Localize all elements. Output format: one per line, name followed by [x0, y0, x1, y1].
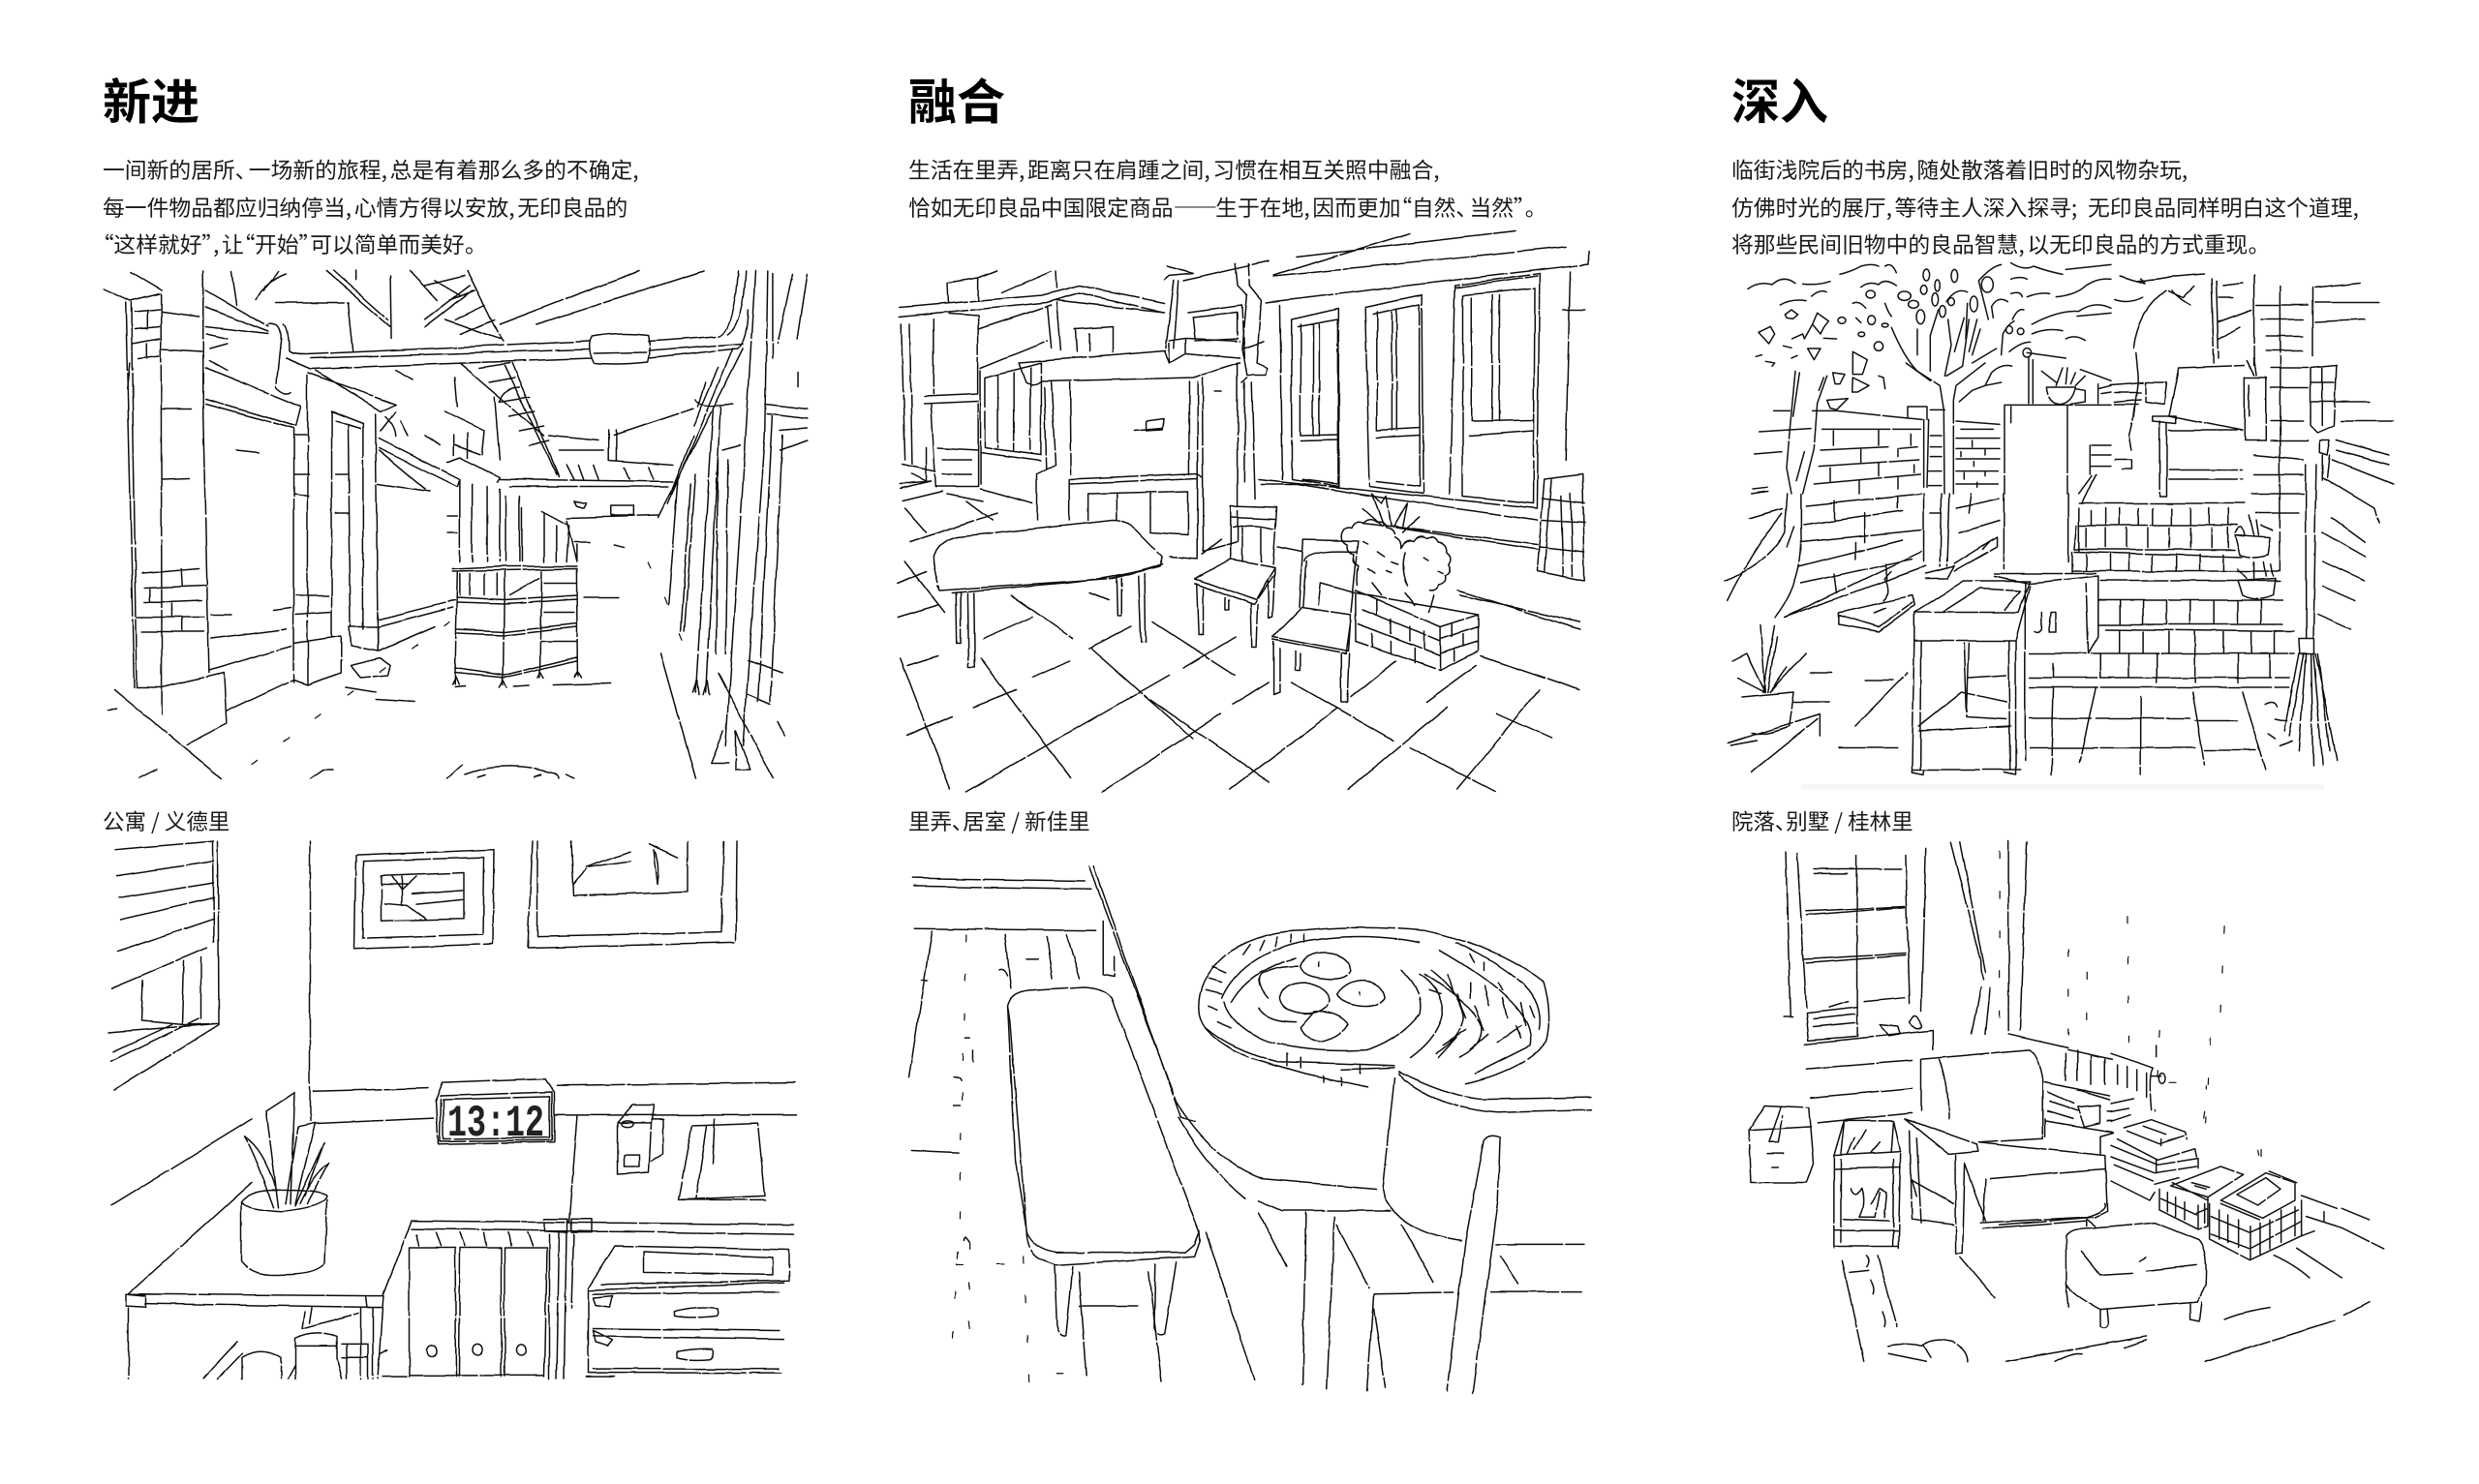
- potted plant: [241, 1093, 329, 1275]
- illustration: bench and basket at Xinjiali: [909, 866, 1592, 1393]
- woven tray: [1199, 927, 1549, 1087]
- brick planter with plant: [1318, 494, 1479, 670]
- wire basket left: [2159, 1166, 2244, 1229]
- wall, eaves and doors: [205, 290, 519, 712]
- paving tiles: [898, 482, 1579, 792]
- rug and slippers: [1842, 1256, 2370, 1361]
- caption: 公寓 / 义德里: 公寓 / 义德里: [103, 805, 230, 836]
- digital clock case: [436, 1078, 554, 1144]
- small cart with plants: [1834, 1121, 1901, 1248]
- right brick walls: [2212, 276, 2393, 629]
- chair one: [1195, 505, 1277, 648]
- building roofline and left facade: [900, 271, 1165, 542]
- title: 深入: 深入: [1731, 64, 1828, 134]
- text block: 新进 description: 一间新的居所、一场新的旅程,总是有着那么多的不确定,: [103, 153, 641, 185]
- cabinet top with potted plant: [2005, 348, 2111, 494]
- caption: 院落、别墅 / 桂林里: 院落、别墅 / 桂林里: [1731, 805, 1913, 836]
- text block: 深入 description: [1731, 153, 2361, 259]
- tree trunks and branches: [1787, 303, 2012, 494]
- drawers and papers: [586, 1246, 789, 1377]
- right facade and windows: [1259, 231, 1589, 552]
- text block: 深入 description: 临街浅院后的书房,随处散落着旧时的风物杂玩,: [1731, 153, 2190, 185]
- caption: 里弄、居室 / 新佳里: 里弄、居室 / 新佳里: [908, 805, 1090, 836]
- book stack: [2111, 1099, 2198, 1200]
- illustration detail: radiator end, book stack and wire baskets: [2111, 1045, 2384, 1278]
- radiator end and valve: [2111, 1045, 2259, 1155]
- cardboard box: [1749, 1105, 1814, 1182]
- illustration: courtyard steps at Guilinli: [1726, 273, 2393, 774]
- left brick walls, lower: [1749, 492, 1999, 618]
- clock digits: 13:12: [447, 1099, 544, 1149]
- ground marks and manhole: [139, 561, 785, 778]
- potted plants on steps: [2235, 515, 2276, 599]
- right posts and door frames: [658, 271, 808, 770]
- overhead pipes: [231, 271, 748, 394]
- roof and far buildings: [325, 271, 673, 561]
- footstool: [2066, 1223, 2207, 1328]
- wire basket right: [2210, 1171, 2302, 1260]
- title: 新进: 新进: [103, 64, 199, 134]
- band: faint image edge under courtyard sketch: [1801, 784, 2324, 790]
- text block: 融合 description: 生活在里弄,距离只在肩踵之间,习惯在相互关照中融合,: [908, 153, 1442, 185]
- broom: [2284, 465, 2337, 765]
- wall and picture frames: [310, 841, 737, 1121]
- text block: 深入 description: 将那些民间旧物中的良品智慧,以无印良品的方式重现。: [1731, 227, 2259, 259]
- floor boards: [909, 878, 1161, 1383]
- chair two: [1273, 540, 1358, 703]
- illustration: apartment desk at Yideli: [108, 841, 799, 1378]
- text block: 新进 description: 每一件物品都应归纳停当,心情方得以安放,无印良品的: [103, 190, 627, 223]
- desk top edge: [111, 1082, 799, 1378]
- camera: [618, 1105, 663, 1174]
- chairs: [1302, 1136, 1580, 1393]
- window: [1784, 849, 1933, 1123]
- bench: [1008, 987, 1200, 1336]
- illustration: alley at Yideli: [104, 271, 808, 778]
- brick tray and small pot: [1839, 571, 1914, 631]
- central portico: [1019, 261, 1269, 560]
- floor skirting and rug edges: [2274, 1196, 2384, 1278]
- white box and upper landing: [2004, 358, 2266, 569]
- floor tiles: [1785, 552, 2292, 774]
- notebook: [679, 1119, 765, 1199]
- curtain and wall: [1951, 841, 2261, 1158]
- dining table: [933, 521, 1162, 668]
- illustration detail: trees, foliage and upper walls of the courtyard: [1748, 263, 2111, 494]
- carton box: [1995, 573, 2098, 653]
- text block: 新进 description: [103, 153, 641, 259]
- buns: [1259, 953, 1385, 1042]
- stacked books and glass: [2045, 1082, 2112, 1127]
- left brick pillar: [104, 271, 227, 778]
- binders: [409, 1232, 547, 1377]
- illustration: courtyard with table at Xinjiali: [898, 231, 1589, 792]
- steps: [2030, 503, 2294, 687]
- potted grass: [1728, 624, 1820, 772]
- edge of table and long curved counter: [1089, 866, 1592, 1379]
- items under the desk: [203, 1308, 407, 1378]
- illustration: reading corner at Guilinli: [1749, 841, 2370, 1361]
- armchair: [1905, 1049, 2114, 1254]
- metal shelf unit: [452, 566, 581, 687]
- foliage right side: [2115, 273, 2204, 436]
- text block: 融合 description: 恰如无印良品中国限定商品——生于在地,因而更加“自然、当然”。: [908, 190, 1536, 223]
- radio and ornaments: [1806, 1002, 1921, 1040]
- text block: 新进 description: “这样就好”,让“开始”可以简单而美好。: [103, 227, 475, 259]
- text block: 融合 description: [908, 153, 1536, 223]
- text block: 深入 description: 仿佛时光的展厅,等待主人深入探寻;无印良品同样明白这个道理,: [1731, 190, 2361, 223]
- radiator: [2066, 1049, 2112, 1084]
- foliage and leaves: [1748, 263, 2111, 409]
- utility cart: [1912, 581, 2030, 774]
- upper brick walls: [1753, 407, 2000, 494]
- wires: [500, 271, 703, 436]
- title: 融合: 融合: [908, 64, 1005, 134]
- window blind: [108, 841, 219, 1090]
- AC / grid panel on right wall: [1537, 474, 1584, 581]
- trees, lower trunks: [1726, 494, 1949, 618]
- downpipe: [1236, 263, 1268, 499]
